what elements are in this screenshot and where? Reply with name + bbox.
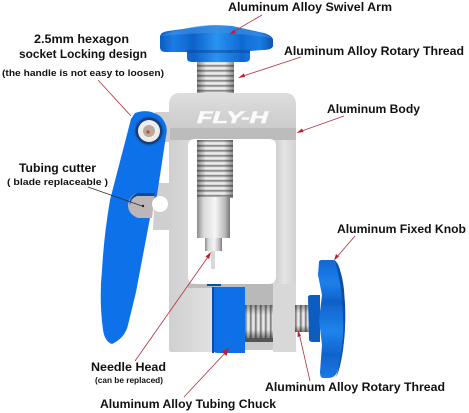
needle sleeve	[197, 197, 230, 269]
label: hexagon locking design: socket Locking design	[19, 47, 147, 61]
label: needle head: Needle Head	[91, 360, 166, 374]
top screw thread	[197, 60, 234, 94]
label: hexagon locking design: (the handle is not easy to loosen)	[2, 68, 164, 79]
lower screw thread	[197, 140, 233, 198]
label: needle head	[91, 360, 166, 385]
label: aluminum body: Aluminum Body	[327, 102, 420, 116]
label: fixed knob: Aluminum Fixed Knob	[337, 222, 466, 236]
arrow: swivel arm	[229, 15, 262, 34]
label: needle head: (can be replaced)	[95, 376, 163, 385]
label: lower rotary thread: Aluminum Alloy Rotary Thread	[265, 380, 445, 394]
side screw thread	[245, 305, 310, 338]
label: tubing cutter	[7, 161, 108, 188]
blue cutter handle	[101, 111, 168, 344]
label: swivel arm: Aluminum Alloy Swivel Arm	[228, 0, 392, 14]
fixed knob	[308, 260, 345, 378]
aluminum body frame	[169, 93, 296, 352]
pivot bracket	[155, 112, 170, 142]
arrow: tubing chuck	[184, 348, 229, 397]
arrow: top rotary thread	[238, 57, 301, 78]
label: hexagon locking design	[2, 32, 164, 79]
callout arrows	[88, 15, 355, 397]
top knob: swivel arm	[160, 25, 273, 62]
label: hexagon locking design: 2.5mm hexagon	[34, 32, 129, 46]
label: top rotary thread: Aluminum Alloy Rotary Thread	[284, 44, 464, 58]
tool illustration	[101, 25, 345, 378]
arrow: fixed knob	[334, 236, 355, 260]
blade slot bracket	[153, 183, 170, 230]
pivot screw	[134, 116, 164, 146]
arrow: aluminum body	[296, 116, 344, 133]
arrow: hexagon socket	[98, 80, 131, 116]
blade slot	[128, 193, 155, 218]
logo text: FLY-H	[197, 108, 269, 127]
blue tubing chuck	[207, 284, 245, 353]
label: tubing chuck: Aluminum Alloy Tubing Chuck	[100, 397, 276, 411]
arrow: lower rotary thread	[298, 330, 310, 381]
label: tubing cutter: ( blade replaceable )	[7, 177, 108, 188]
label: tubing cutter: Tubing cutter	[19, 161, 96, 175]
arrow: tubing cutter	[88, 187, 144, 207]
arrow: needle head	[135, 252, 211, 361]
